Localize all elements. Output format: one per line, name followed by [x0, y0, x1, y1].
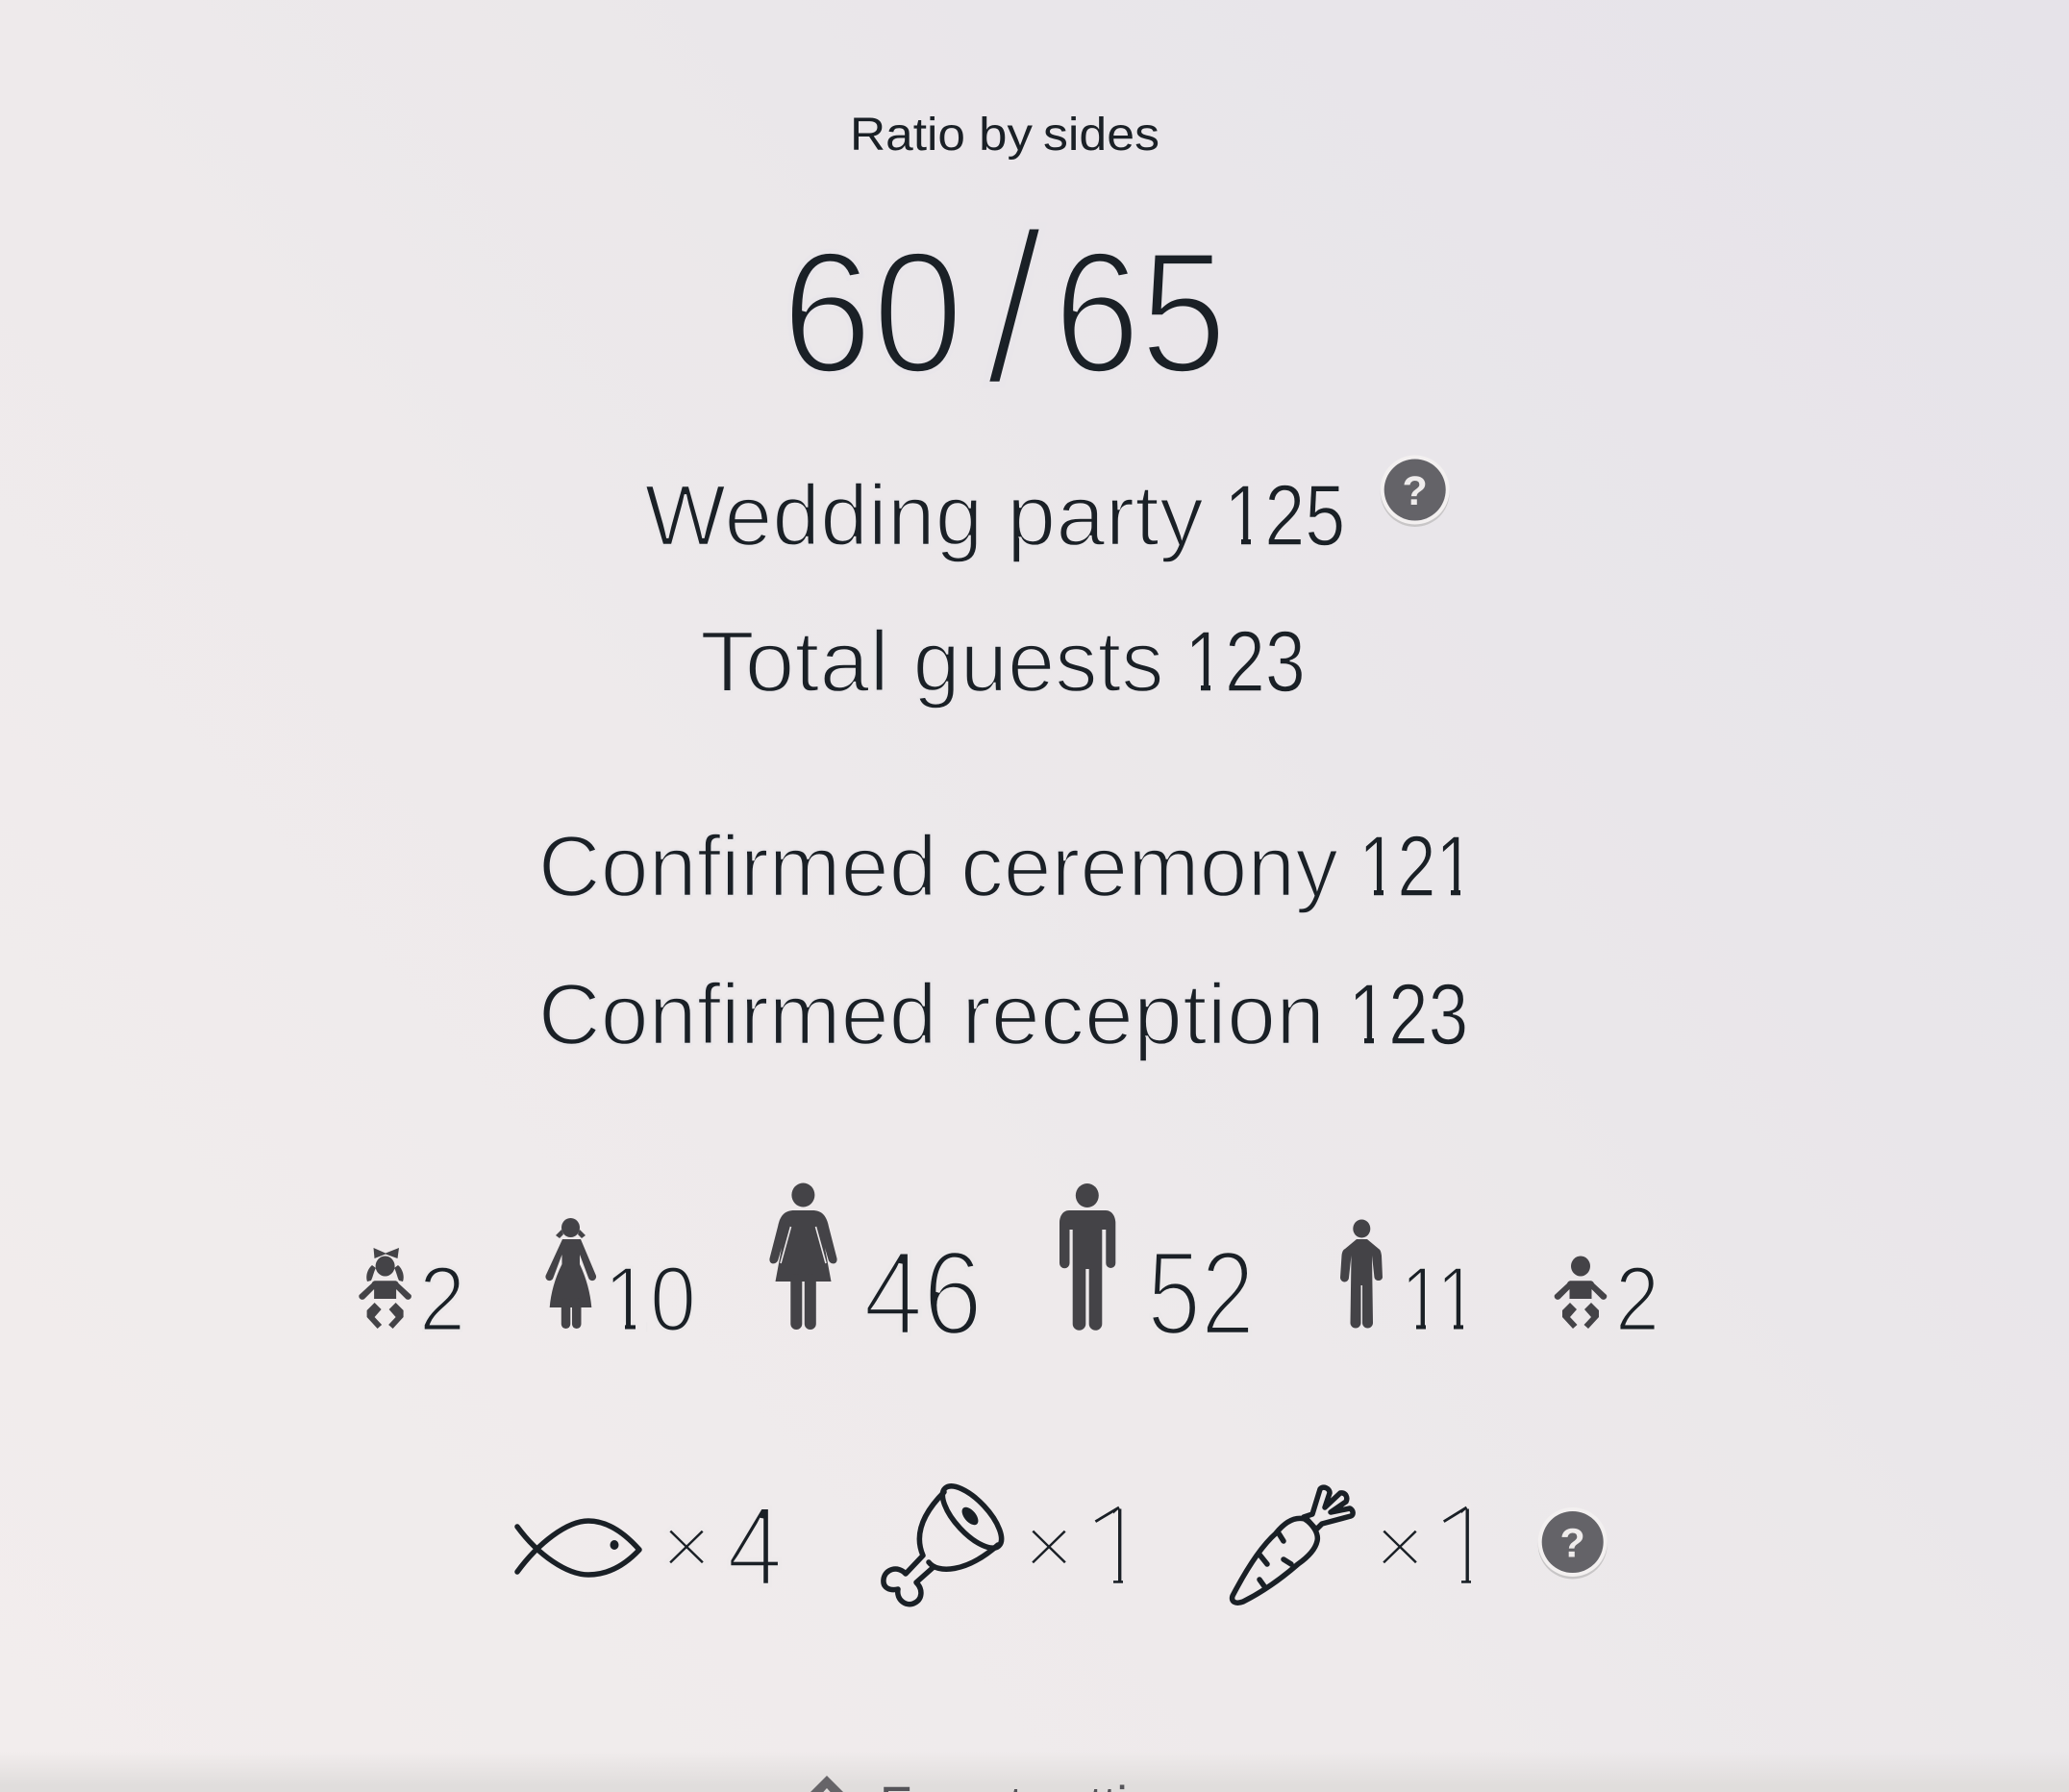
- big number: side ratio 60/65: /: [985, 187, 1043, 429]
- count: baby boys: 2: [1615, 1248, 1659, 1351]
- stat: total guests: guests: [913, 614, 1163, 710]
- stat: confirmed reception: Confirmed: [538, 967, 937, 1063]
- stat: confirmed reception: [544, 983, 1465, 1061]
- count: meat meals: [1094, 1506, 1123, 1583]
- help button: meals: [1538, 1507, 1608, 1579]
- big number: side ratio 60/65: [782, 187, 1227, 429]
- count: women: 46: [863, 1228, 983, 1360]
- count: fish meals: 4: [727, 1483, 783, 1610]
- count: meat meals: 1: [1092, 1481, 1144, 1611]
- big number: side ratio 60/65: 60: [782, 216, 963, 410]
- footer bar: [0, 1752, 2069, 1792]
- icon: girl: [545, 1218, 596, 1329]
- count: boys: 11: [1401, 1248, 1478, 1351]
- heading: ratio by sides: by: [979, 110, 1033, 161]
- heading: ratio by sides: Ratio: [850, 110, 965, 161]
- icon: export arrow: [804, 1776, 850, 1792]
- stat: confirmed reception: 123: [1348, 967, 1468, 1063]
- help button: wedding party: ?: [1403, 468, 1428, 514]
- count: men: 52: [1147, 1228, 1255, 1360]
- count: vegetarian meals: [1443, 1506, 1471, 1583]
- help button: wedding party: [1381, 456, 1450, 527]
- heading: ratio by sides: sides: [1043, 110, 1159, 161]
- stat: confirmed ceremony: ceremony: [960, 819, 1338, 915]
- stat: confirmed reception: reception: [961, 967, 1325, 1063]
- stat: confirmed ceremony: Confirmed: [538, 819, 937, 915]
- icon: fish: [517, 1521, 639, 1575]
- big number: side ratio 60/65: 65: [1054, 216, 1227, 410]
- stat: wedding party: 125: [1224, 468, 1345, 564]
- icon: boy: [1340, 1219, 1383, 1329]
- count: vegetarian meals: 1: [1440, 1481, 1492, 1611]
- icon: woman: [769, 1182, 837, 1330]
- heading: ratio by sides: [850, 110, 1159, 161]
- stat: total guests: 123: [1184, 614, 1306, 710]
- icon: ham: [884, 1477, 1010, 1605]
- icon: baby boy: [1555, 1256, 1607, 1329]
- stat: total guests: [703, 629, 1302, 708]
- icon: baby girl: [359, 1248, 411, 1329]
- multiplier: fish times: ×: [661, 1499, 712, 1595]
- multiplier: meat times: ×: [1023, 1499, 1075, 1595]
- icon: man: [1059, 1183, 1115, 1331]
- stat: wedding party: party: [1007, 468, 1204, 564]
- stat: total guests: Total: [700, 614, 889, 710]
- help button: meals: ?: [1560, 1521, 1585, 1567]
- icon: carrot: [1233, 1487, 1353, 1603]
- stat: confirmed ceremony: [544, 834, 1460, 913]
- multiplier: vegetarian times: ×: [1374, 1499, 1426, 1595]
- stat: wedding party: [646, 483, 1342, 561]
- stat: wedding party: Wedding: [644, 468, 983, 564]
- count: girls: 10: [604, 1248, 696, 1351]
- count: baby girls: 2: [419, 1248, 465, 1351]
- stat: confirmed ceremony: 121: [1359, 819, 1475, 915]
